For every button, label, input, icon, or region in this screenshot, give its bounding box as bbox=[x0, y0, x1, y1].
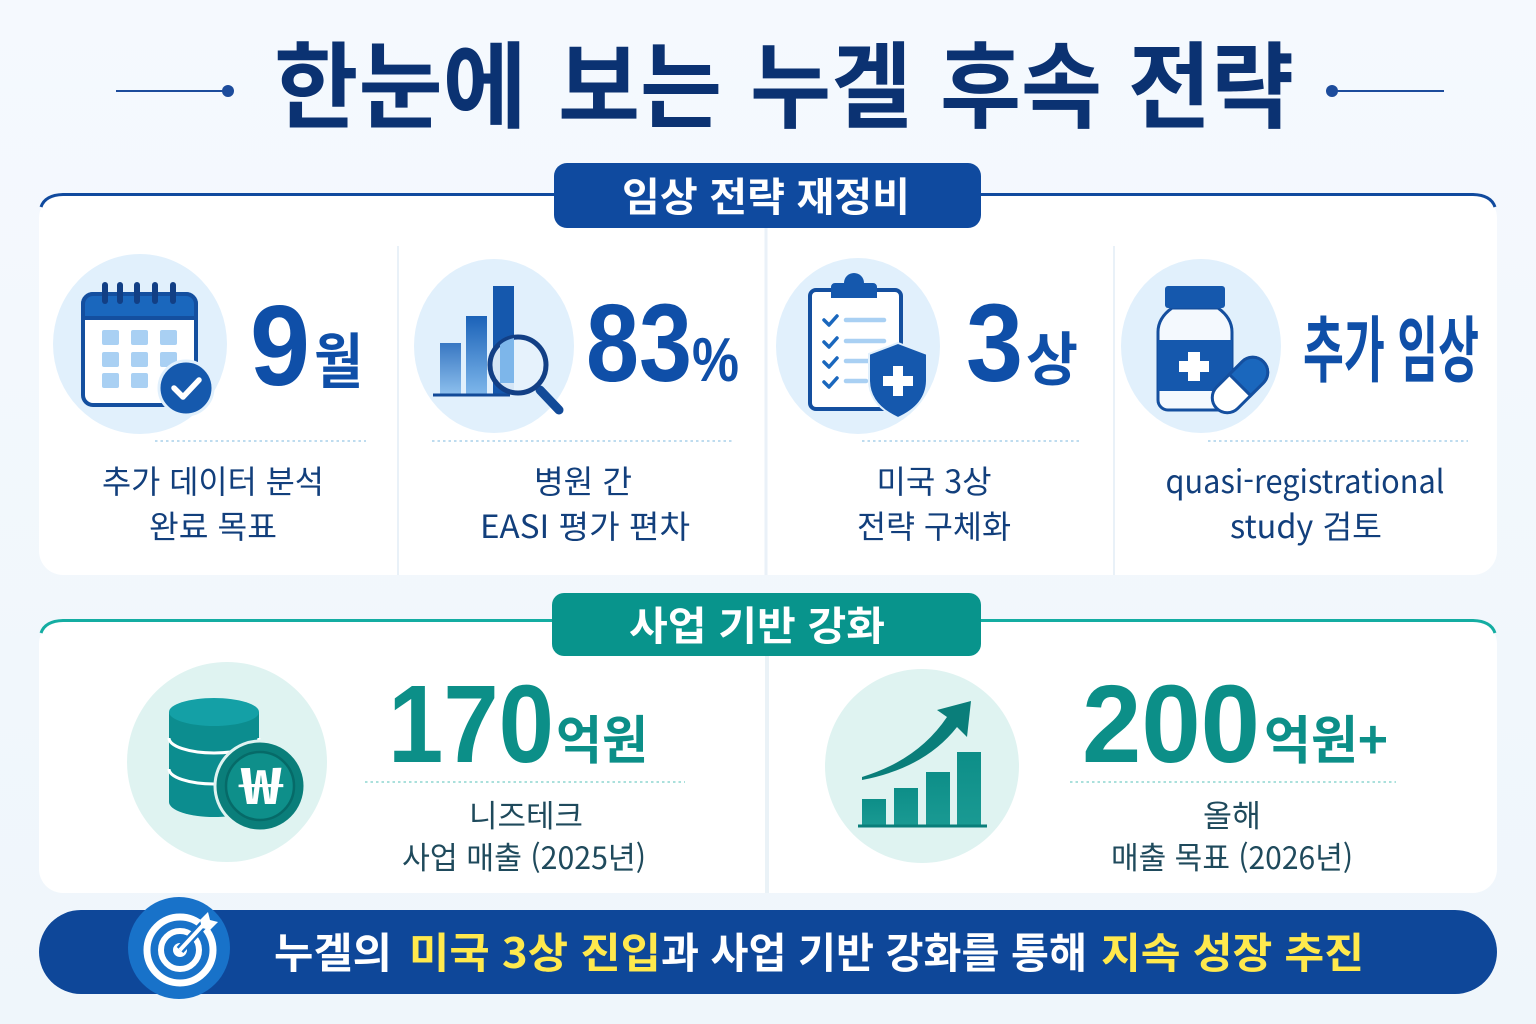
title: 후속 bbox=[940, 12, 1102, 148]
text: additional data analysis bbox=[102, 457, 324, 548]
card: 170 bbox=[127, 662, 685, 878]
text: quasi-registrational study: study 검토 bbox=[1230, 502, 1382, 548]
text: EASI deviation between hospitals bbox=[480, 457, 690, 548]
text: additional data analysis: 완료 목표 bbox=[149, 502, 277, 548]
stat: 9월: 9 bbox=[250, 283, 310, 410]
icon: calendar bbox=[53, 254, 227, 434]
stat: 200억원+: 억원+ bbox=[1264, 699, 1388, 774]
title: 누겔 bbox=[750, 12, 912, 148]
stat: 170억원: 억원 bbox=[556, 699, 648, 774]
text: this year's sales target bbox=[1111, 791, 1353, 878]
icon: bar chart with magnifier bbox=[414, 259, 574, 433]
icon: target with arrow bbox=[128, 897, 230, 999]
card: 200 bbox=[825, 663, 1396, 878]
heading: clinical strategy: 임상 전략 재정비 bbox=[622, 165, 910, 223]
panel: clinical strategy bbox=[39, 163, 1497, 575]
icon: medicine bottle and capsule bbox=[1121, 259, 1281, 433]
stat: 9월 bbox=[250, 283, 363, 410]
title: 전략 bbox=[1128, 12, 1294, 148]
text: EASI deviation between hospitals: EASI 평가 편차 bbox=[480, 502, 690, 548]
stat: 3상 bbox=[966, 282, 1078, 405]
text: US phase 3 strategy bbox=[857, 457, 1011, 548]
card: phase 3 bbox=[776, 258, 1082, 548]
stat: 9월: 월 bbox=[314, 314, 363, 401]
stat: 83%: 83 bbox=[586, 282, 692, 405]
text: NisTech business sales bbox=[402, 791, 646, 878]
text: quasi-registrational study: quasi-registrational bbox=[1166, 457, 1444, 503]
title: 보는 bbox=[558, 12, 722, 148]
icon: clipboard with shield bbox=[776, 258, 940, 434]
stat: 200억원+: 200 bbox=[1082, 663, 1260, 786]
text: conclusion message: 지속 성장 추진 bbox=[1101, 920, 1364, 981]
text: this year's sales target: 올해 bbox=[1203, 791, 1261, 836]
stat: 3상: 3 bbox=[966, 282, 1023, 405]
icon: coin stack with won: ₩ bbox=[237, 747, 284, 819]
heading: business foundation bbox=[552, 593, 981, 656]
icon: coin stack with won bbox=[127, 662, 327, 862]
banner: conclusion bbox=[39, 897, 1497, 999]
stat: 170억원: 170 bbox=[388, 663, 554, 786]
title bbox=[116, 12, 1444, 148]
stat: 3상: 상 bbox=[1026, 313, 1078, 397]
heading: clinical strategy bbox=[554, 163, 981, 228]
card: September bbox=[53, 254, 366, 548]
panel: business foundation bbox=[39, 593, 1497, 893]
icon: rising bar chart with arrow bbox=[825, 669, 1019, 863]
text: additional data analysis: 추가 데이터 분석 bbox=[102, 457, 324, 503]
card: 83% bbox=[414, 259, 739, 548]
text: US phase 3 strategy: 미국 3상 bbox=[876, 457, 992, 503]
text: quasi-registrational study bbox=[1166, 457, 1444, 548]
text: conclusion message bbox=[274, 920, 1364, 981]
text: EASI deviation between hospitals: 병원 간 bbox=[534, 457, 632, 503]
stat: 83%: % bbox=[692, 326, 739, 395]
text: NisTech business sales: 사업 매출 (2025년) bbox=[402, 833, 646, 878]
stat: 200억원+ bbox=[1082, 663, 1388, 786]
text: US phase 3 strategy: 전략 구체화 bbox=[857, 502, 1011, 548]
heading: business foundation: 사업 기반 강화 bbox=[629, 594, 885, 652]
title: 한눈에 bbox=[274, 12, 527, 148]
text: conclusion message: 과 사업 기반 강화를 통해 bbox=[661, 920, 1087, 981]
card: additional trial bbox=[1121, 259, 1479, 548]
text: NisTech business sales: 니즈테크 bbox=[469, 791, 583, 836]
text: conclusion message: 누겔의 bbox=[274, 920, 392, 981]
text: conclusion message: 미국 3상 진입 bbox=[409, 920, 661, 981]
text: this year's sales target: 매출 목표 (2026년) bbox=[1111, 833, 1353, 878]
